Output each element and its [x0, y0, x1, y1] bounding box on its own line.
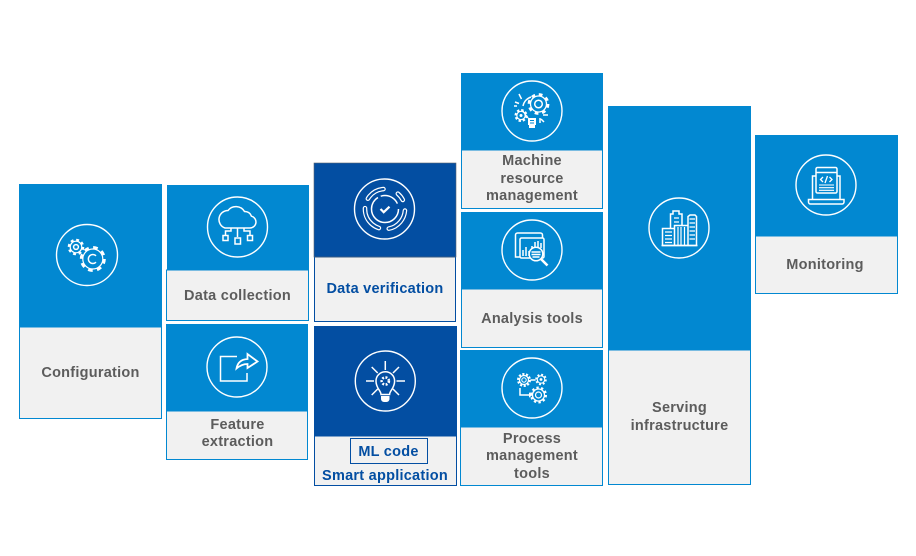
label: smart application: Smart application [322, 468, 448, 484]
panel: monitoring [755, 135, 898, 294]
label: process management tools: Process [503, 431, 561, 447]
icon: export arrow [207, 337, 267, 397]
panel: machine resource management [461, 73, 603, 208]
icon: brain bulb gears [502, 81, 562, 141]
label: machine resource management [486, 153, 578, 204]
icon: process gears [502, 358, 562, 418]
label: analysis tools: Analysis tools [481, 311, 583, 327]
label: machine resource management: Machine [502, 153, 562, 169]
label: data collection: Data collection [184, 288, 291, 304]
icon: city buildings [649, 198, 709, 258]
icon: laptop code [796, 155, 856, 215]
label: feature extraction: extraction [202, 434, 273, 450]
panel: analysis tools [461, 212, 603, 348]
callout: ml code [350, 438, 428, 464]
callout: ml code: ML code [358, 444, 419, 460]
panel: serving infrastructure [608, 106, 751, 484]
label: feature extraction: Feature [210, 417, 265, 433]
icon: chart magnifier [502, 220, 562, 280]
icon: light bulb [355, 351, 415, 411]
label: data verification: Data verification [326, 281, 444, 297]
icon: verification target [354, 179, 414, 239]
label: configuration: Configuration [41, 365, 140, 381]
label: monitoring: Monitoring [786, 257, 864, 273]
panel: process management tools [460, 350, 603, 486]
label: process management tools: management [486, 448, 578, 464]
icon: configuration gears [56, 224, 118, 286]
label: process management tools: tools [514, 466, 550, 482]
panel: configuration [19, 184, 162, 418]
panel: smart application [314, 326, 457, 486]
panel: data verification [314, 163, 456, 322]
label: serving infrastructure [631, 400, 728, 434]
icon: cloud network [208, 197, 268, 257]
label: serving infrastructure: Serving [652, 400, 707, 416]
label: feature extraction [202, 417, 273, 450]
label: process management tools [486, 431, 578, 482]
panel: data collection [166, 185, 309, 320]
label: machine resource management: resource [500, 171, 564, 187]
label: serving infrastructure: infrastructure [631, 418, 728, 434]
panel: feature extraction [166, 324, 308, 460]
label: machine resource management: management [486, 188, 578, 204]
